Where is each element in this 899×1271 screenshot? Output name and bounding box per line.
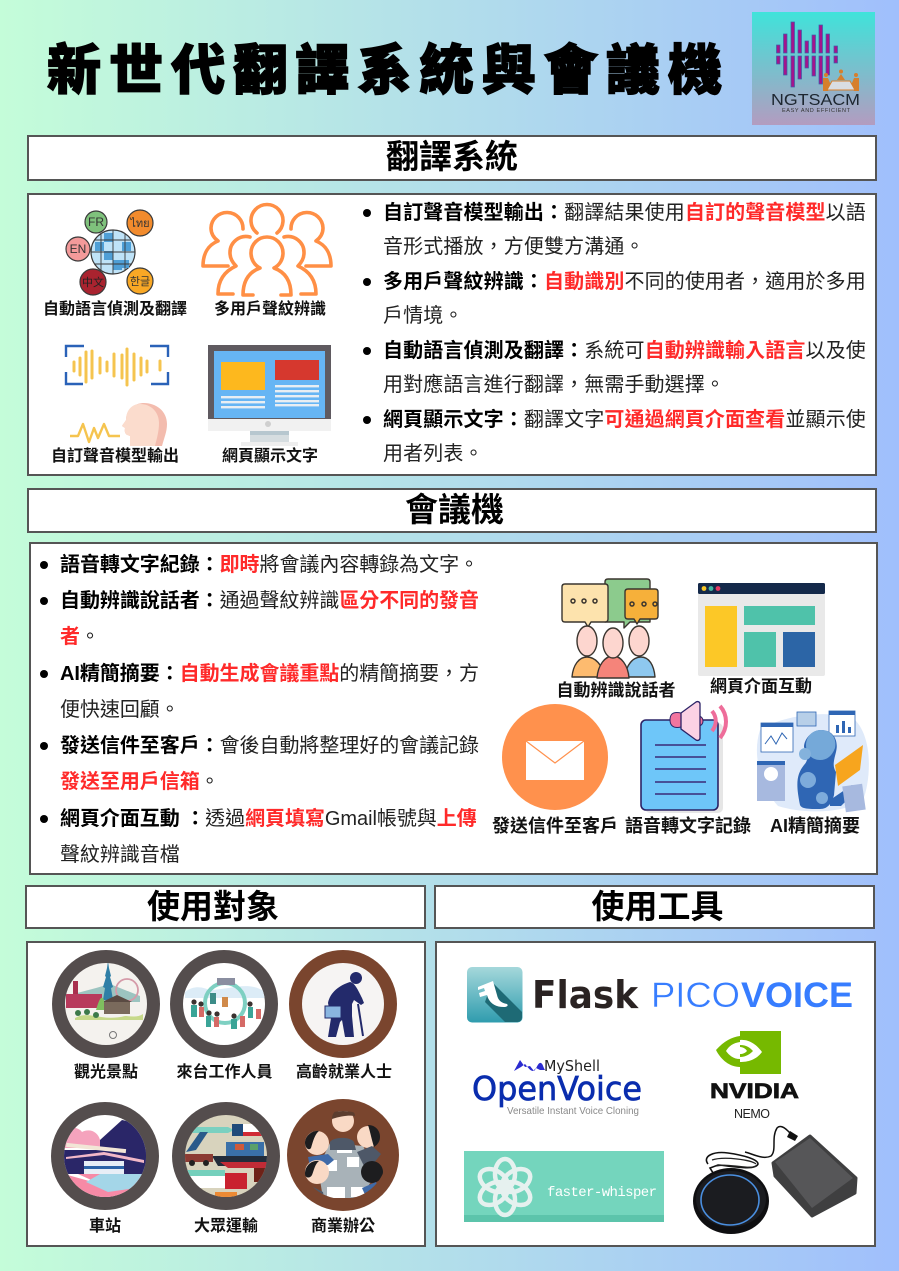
icon: language detection globe: ไทย [129, 217, 150, 230]
icon: 大眾運輸 [172, 1102, 280, 1210]
logo: NGTSACM [752, 12, 875, 125]
icon: mail [502, 704, 608, 810]
bullet: 自動語言偵測及翻譯: 用對應語言進行翻譯，無需手動選擇。 [383, 374, 725, 396]
logo: NVIDIA NEMO: NVIDIA [710, 1080, 799, 1103]
icon: web display monitor [208, 345, 331, 446]
panel: 使用工具 [435, 941, 876, 1247]
label: 來台工作人員 [176, 1064, 272, 1081]
heading: 使用對象 [25, 885, 426, 929]
heading: 翻譯系統 [27, 135, 877, 181]
logo: NGTSACM: NGTSACM [771, 92, 860, 109]
bullet: 語音轉文字紀錄: 語音轉文字紀錄：即時將會議內容轉錄為文字。 [60, 554, 479, 576]
bullet: 自動辨識說話者 [40, 590, 479, 648]
panel: 使用對象 [26, 941, 426, 1247]
logo: Picovoice [651, 976, 853, 1015]
logo: Flask: Flask [532, 973, 639, 1017]
bullet: 多用戶聲紋辨識 [363, 270, 866, 327]
bullet: 網頁顯示文字: 用者列表。 [383, 443, 484, 465]
label: 網頁顯示文字 [222, 448, 318, 465]
logo: Picovoice: VOICE [741, 976, 853, 1015]
title: 新世代翻譯系統與會議機 [47, 41, 730, 101]
icon: custom voice model [64, 344, 170, 446]
bullet: 發送信件至客戶: 發送至用戶信箱。 [60, 771, 220, 793]
icon: language detection globe [65, 209, 154, 296]
bullet: 自動語言偵測及翻譯 [363, 340, 866, 396]
label: 發送信件至客戶 [492, 816, 618, 836]
bullet: 發送信件至客戶 [40, 734, 479, 793]
label: 高齡就業人士 [296, 1064, 392, 1081]
icon: multi-user voiceprint [201, 202, 333, 297]
logo: MyShell OpenVoice: MyShell [544, 1057, 600, 1075]
logo: NVIDIA NEMO [710, 1031, 799, 1121]
icon: 高齡就業人士 [289, 950, 397, 1058]
bullet: AI精簡摘要: AI精簡摘要：自動生成會議重點的精簡摘要，方 [60, 663, 479, 685]
bullet: 網頁介面互動: 網頁介面互動 ：透過網頁填寫Gmail帳號與上傳 [60, 808, 477, 830]
label: 語音轉文字記錄 [625, 816, 751, 836]
panel: 翻譯系統 [27, 193, 877, 476]
bullet: 多用戶聲紋辨識: 戶情境。 [383, 305, 463, 327]
icon: AI robot [757, 710, 869, 812]
icon: speakers chat [561, 578, 659, 679]
logo: Flask [467, 967, 639, 1022]
bullet: 發送信件至客戶: 發送信件至客戶：會後自動將整理好的會議記錄 [60, 735, 479, 757]
label: 觀光景點 [74, 1064, 138, 1081]
bullet: 多用戶聲紋辨識: 多用戶聲紋辨識：自動識別不同的使用者，適用於多用 [383, 271, 866, 293]
icon: language detection globe: FR [88, 215, 104, 229]
heading: 會議機: 會議機 [405, 491, 504, 528]
label: 商業辦公 [311, 1218, 375, 1235]
heading: 使用對象: 使用對象 [147, 888, 279, 925]
bullet: 自訂聲音模型輸出: 音形式播放，方便雙方溝通。 [383, 236, 645, 258]
heading: 會議機 [27, 488, 877, 533]
icon: web interface [698, 583, 825, 676]
label: 網頁介面互動 [710, 677, 812, 696]
label: 多用戶聲紋辨識 [214, 301, 326, 318]
heading: 翻譯系統: 翻譯系統 [386, 138, 518, 175]
logo: NGTSACM: EASY AND EFFICIENT [782, 108, 851, 114]
logo: Picovoice: PICO [651, 976, 740, 1015]
logo: faster-whisper: faster-whisper [547, 1185, 657, 1201]
bullet: 網頁顯示文字: 網頁顯示文字：翻譯文字可通過網頁介面查看並顯示使 [383, 409, 866, 431]
heading: 使用工具 [434, 885, 875, 929]
icon: 車站 [51, 1102, 159, 1210]
heading: 使用工具: 使用工具 [592, 888, 724, 925]
bullet: AI精簡摘要: 便快速回顧。 [60, 699, 180, 721]
label: 自訂聲音模型輸出 [51, 448, 179, 465]
logo: faster-whisper [464, 1151, 664, 1222]
bullet: 自訂聲音模型輸出: 自訂聲音模型輸出：翻譯結果使用自訂的聲音模型以語 [383, 202, 866, 224]
label: AI精簡摘要 [770, 816, 860, 836]
icon: speech to text document [640, 700, 728, 813]
panel: 會議機 [29, 542, 878, 875]
logo: MyShell OpenVoice: Versatile Instant Voice Cloning [507, 1105, 639, 1117]
label: 自動辨識說話者 [556, 681, 676, 700]
label: 車站 [89, 1218, 121, 1235]
icon: language detection globe: 中文 [82, 275, 104, 289]
bullet: 網頁介面互動: 聲紋辨識音檔 [60, 844, 180, 866]
bullet: 自動辨識說話者: 者。 [60, 626, 100, 648]
logo: MyShell OpenVoice [472, 1057, 642, 1117]
icon: 商業辦公 [287, 1099, 399, 1211]
logo: NVIDIA NEMO: NEMO [734, 1107, 770, 1121]
bullet: 自動辨識說話者: 自動辨識說話者：通過聲紋辨識區分不同的發音 [60, 590, 479, 612]
label: 自動語言偵測及翻譯 [43, 301, 187, 318]
bullet: 網頁顯示文字 [363, 408, 866, 465]
icon: 來台工作人員 [170, 950, 278, 1058]
icon: language detection globe: EN [70, 242, 86, 256]
logo: MyShell OpenVoice: OpenVoice [472, 1069, 642, 1108]
icon: meeting device [693, 1126, 858, 1234]
icon: 觀光景點 [52, 950, 160, 1058]
label: 大眾運輸 [194, 1218, 258, 1235]
bullet: 自訂聲音模型輸出 [363, 202, 866, 258]
bullet: 網頁介面互動 [40, 808, 477, 866]
bullet: 自動語言偵測及翻譯: 自動語言偵測及翻譯：系統可自動辨識輸入語言以及使 [383, 340, 866, 362]
icon: language detection globe: 한글 [130, 275, 150, 288]
bullet: AI精簡摘要 [40, 662, 479, 721]
